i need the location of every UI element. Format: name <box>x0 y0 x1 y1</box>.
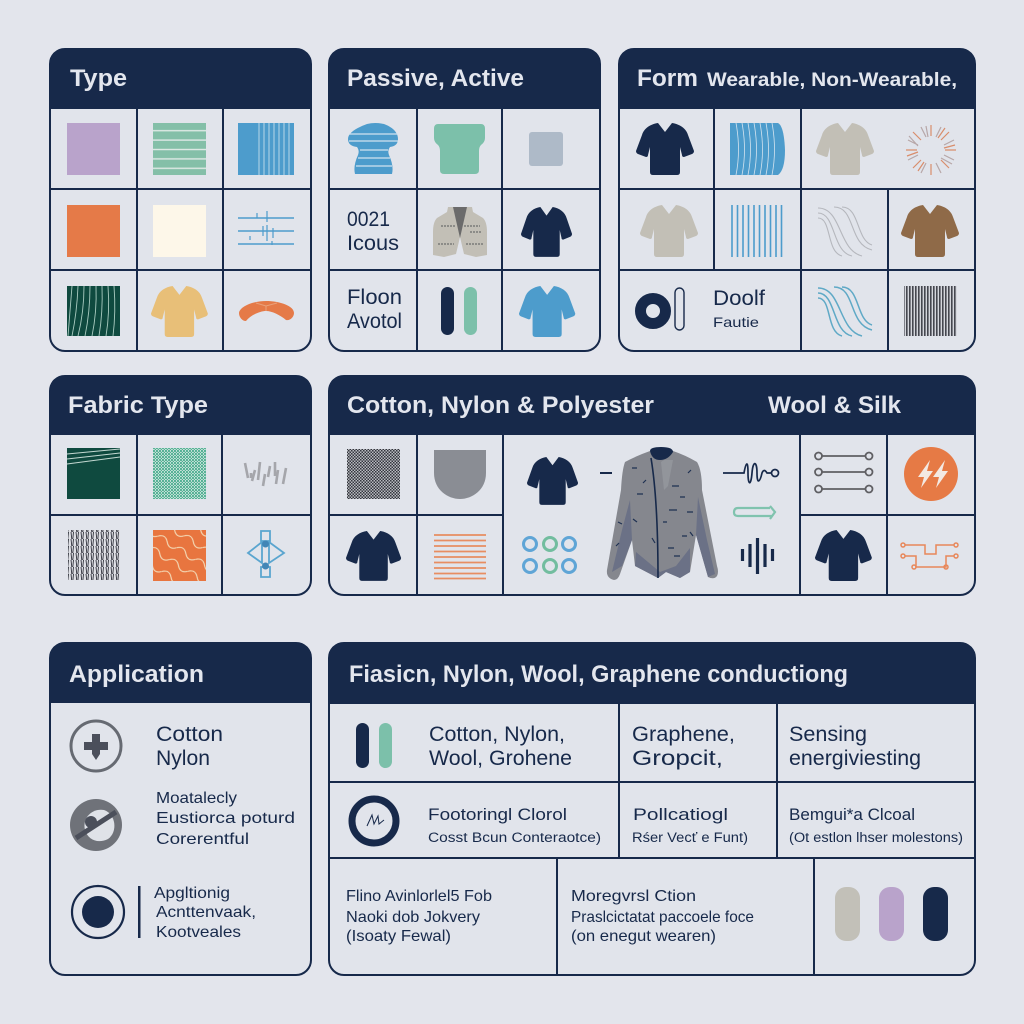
heading: cotton nylon polyester: Cotton, Nylon & Polyester <box>347 392 654 419</box>
icon: yellow shirt <box>151 286 208 337</box>
panel: materials <box>329 376 975 595</box>
text: doolf fautie <box>713 287 765 330</box>
swatch: dark green <box>67 448 120 499</box>
swatch: lilac <box>67 123 120 175</box>
icon: donut and pill <box>640 288 684 330</box>
heading: conducting: Fiasicn, Nylon, Wool, Graphene conductiong <box>349 661 848 688</box>
text: applioning: Apgltionig <box>154 885 230 902</box>
icon: audio bars <box>742 538 772 574</box>
heading: wearable: Wearable, Non-Wearable, <box>707 69 957 91</box>
text: applioning <box>154 885 256 941</box>
swatch: orange waves <box>153 530 206 581</box>
icon: orange band <box>239 301 294 321</box>
icon: gray pocket <box>434 450 486 499</box>
icon: signal wave <box>723 464 778 483</box>
text: moregvrsl: Praslcictatat paccoele foce <box>571 909 754 926</box>
text: sensing <box>789 723 921 770</box>
text: sensing: energiviesting <box>789 747 921 770</box>
heading: application: Application <box>69 661 204 688</box>
text: moderately: Corerentful <box>156 831 249 848</box>
text: footoring <box>428 805 601 845</box>
text: cotton nylon: Cotton <box>156 723 223 746</box>
text: bemgui <box>789 805 963 845</box>
text: moderately <box>156 790 295 848</box>
heading: type: Type <box>70 65 127 92</box>
text: cotton nylon wool: Wool, Grohene <box>429 747 572 770</box>
icon: gray waves <box>818 207 872 256</box>
panel: type <box>50 49 311 351</box>
icon: plus circle <box>71 721 121 771</box>
text: graphene <box>632 723 735 770</box>
icon: ring <box>352 799 396 843</box>
connector dash <box>600 472 612 474</box>
icon: striped blue top <box>348 123 398 174</box>
icon: orange circuit <box>901 543 958 569</box>
heading: wool silk: Wool & Silk <box>768 392 902 419</box>
icon: two pills <box>356 723 392 768</box>
icon: gray jacket <box>433 207 487 257</box>
icon: sunburst <box>906 125 956 175</box>
text: footoring: Footoringl Clorol <box>428 805 567 824</box>
panel: passive active <box>329 49 600 351</box>
icon: blue shirt <box>519 286 575 337</box>
text: moderately: Eustiorca poturd <box>156 810 295 827</box>
swatch: black texture <box>68 530 120 580</box>
icon: jacket <box>607 447 718 580</box>
text: floon avotol <box>347 286 402 333</box>
text: bemgui: (Ot estlon lhser molestons) <box>789 830 963 845</box>
icon: gray square <box>529 132 563 166</box>
text: applioning: Acnttenvaak, <box>156 904 256 921</box>
icon: ring grid <box>524 538 576 572</box>
icon: gray dashes <box>245 462 286 486</box>
icon: blue diagram <box>248 531 284 577</box>
swatch: green stripes <box>153 123 206 175</box>
icon: navy shirt left <box>346 531 401 581</box>
text: floon avotol: Floon <box>347 286 402 309</box>
icon: gray shirt 2 <box>640 205 698 257</box>
icon: target circle <box>72 886 124 938</box>
swatch: gray barcode <box>904 286 957 336</box>
text: 0021 icous: Icous <box>347 232 399 255</box>
text: flino: Naoki dob Jokvery <box>346 909 480 926</box>
swatch: cream <box>153 205 206 257</box>
text: flino: (Isoaty Fewal) <box>346 928 451 945</box>
text: cotton nylon wool: Cotton, Nylon, <box>429 723 565 746</box>
icon: navy shirt <box>636 123 694 175</box>
text: pollcatiogl <box>632 805 748 845</box>
text: applioning: Kootveales <box>156 924 241 941</box>
heading: form: Form <box>637 65 698 92</box>
icon: navy shirt right <box>815 530 872 581</box>
icon: blue waves <box>818 287 872 336</box>
icon: orange energy badge <box>904 447 958 501</box>
text: cotton nylon wool <box>429 723 572 770</box>
divider bar <box>138 886 140 938</box>
icon: mint top <box>434 124 485 174</box>
text: moregvrsl <box>571 888 754 945</box>
icon: navy top <box>521 207 572 257</box>
icon: navy shirt center <box>527 457 578 505</box>
text: moregvrsl: (on enegut wearen) <box>571 928 716 945</box>
heading: passive active: Passive, Active <box>347 65 524 92</box>
text: pollcatiogl: Pollcatiogl <box>633 805 728 824</box>
icon: mint arrow <box>734 506 775 519</box>
text: floon avotol: Avotol <box>347 310 402 333</box>
icon: brown shirt <box>901 205 959 257</box>
swatch: blue curved stripes <box>730 123 785 175</box>
swatch: blue stripes <box>238 123 294 175</box>
text: graphene: Graphene, <box>632 723 735 746</box>
swatch: mint dots <box>153 448 206 499</box>
text: cotton nylon: Nylon <box>156 747 210 770</box>
text: doolf fautie: Fautie <box>713 314 759 330</box>
text: graphene: Gropcit, <box>632 747 723 770</box>
swatch: orange <box>67 205 120 257</box>
text: footoring: Cosst Bcun Conteraotce) <box>428 830 601 845</box>
icon: gray shirt <box>816 123 874 175</box>
panel: conducting <box>329 643 975 975</box>
text: moderately: Moatalecly <box>156 790 237 807</box>
text: 0021 icous: 0021 <box>347 208 390 231</box>
swatch: orange stripes <box>434 535 486 578</box>
text: flino <box>346 888 492 945</box>
text: doolf fautie: Doolf <box>713 287 765 310</box>
icon: slider lines <box>815 452 872 492</box>
swatch: dark green lines <box>67 286 120 336</box>
text: 0021 icous <box>347 208 399 255</box>
panel: fabric type <box>50 376 311 595</box>
panel: form <box>619 49 975 351</box>
panel: application <box>50 643 311 975</box>
swatch: gray weave <box>347 449 400 499</box>
text: pollcatiogl: Rśer Vecť e Funt) <box>632 830 748 845</box>
icon: three pills <box>835 887 948 941</box>
text: cotton nylon <box>156 723 223 770</box>
icon: blue circuit <box>238 211 294 245</box>
icon: blocked circle <box>70 799 122 851</box>
text: moregvrsl: Moregvrsl Ction <box>571 888 696 905</box>
heading: fabric type: Fabric Type <box>68 392 208 419</box>
swatch: blue vertical lines <box>732 205 782 257</box>
text: flino: Flino Avinlorlel5 Fob <box>346 888 492 905</box>
icon: two pills <box>441 287 477 335</box>
text: bemgui: Bemgui*a Clcoal <box>789 805 915 824</box>
text: sensing: Sensing <box>789 723 867 746</box>
